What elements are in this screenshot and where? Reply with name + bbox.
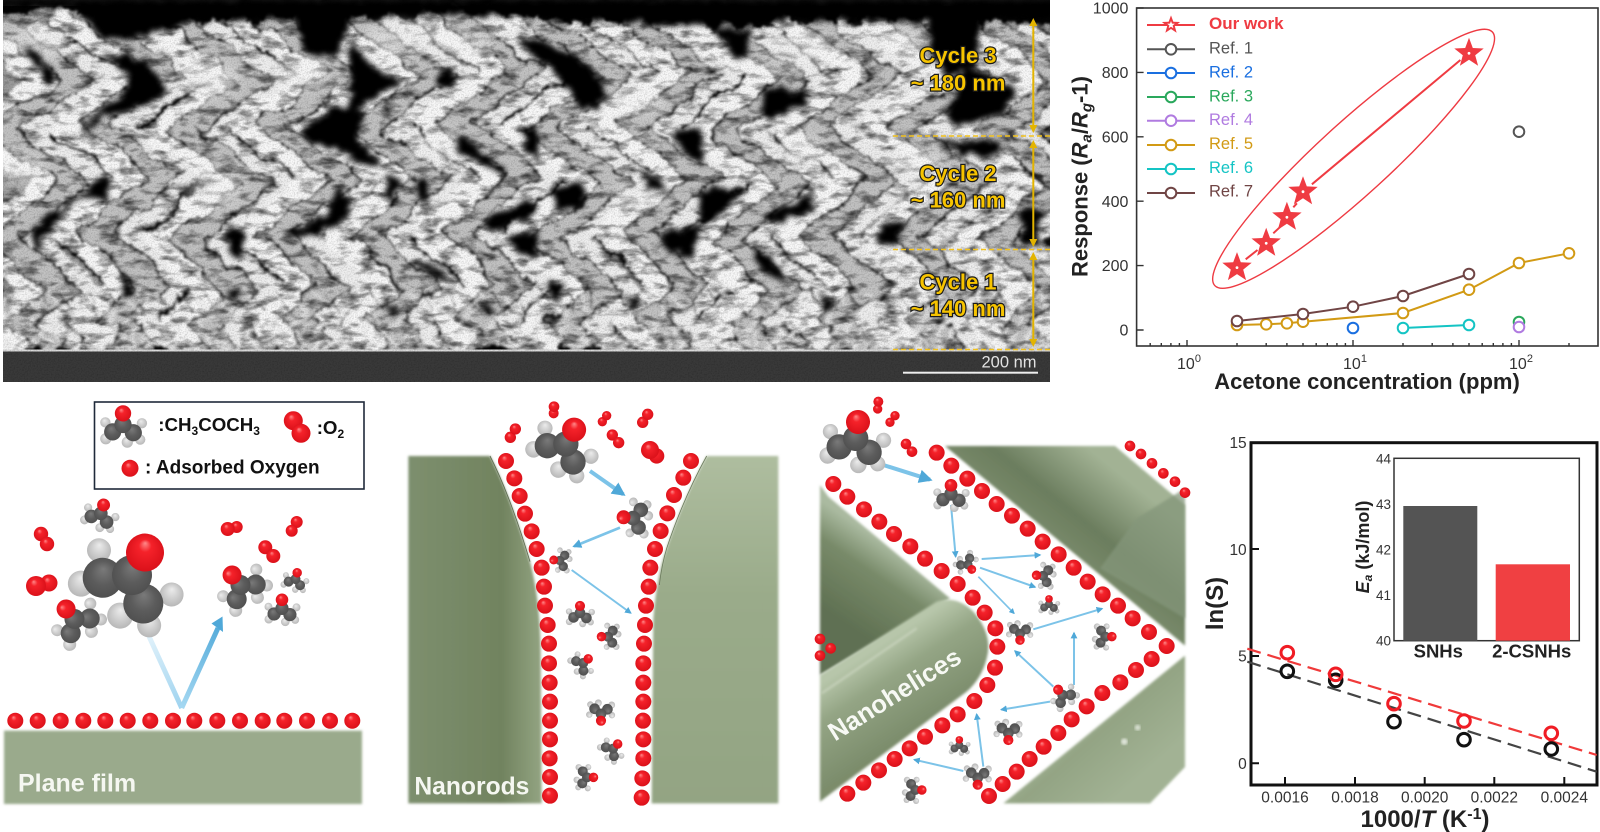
cycle labels (911, 43, 1005, 321)
cycle labels: ~ 160 nm (911, 187, 1005, 212)
inset bar chart: activation energy: (kJ/mol) (1353, 501, 1373, 575)
x-axis tick labels: 10 (1509, 356, 1527, 373)
x-axis tick labels: 0.0024 (1541, 790, 1588, 807)
highlight ellipse (1190, 5, 1517, 312)
chart legend: Ref. 3 (1209, 88, 1253, 106)
chart: ln(S) vs 1000/T (1202, 435, 1597, 832)
series: references 1 to 4 single points (1348, 126, 1524, 333)
panel: nanohelices (815, 397, 1190, 804)
y-axis tick labels: 800 (1102, 65, 1128, 82)
inset bar chart: activation energy: 43 (1376, 497, 1391, 512)
inset bar chart: activation energy: 2-CSNHs (1492, 641, 1571, 662)
series: reference 6 (1398, 320, 1474, 333)
chart legend: Ref. 4 (1209, 111, 1253, 129)
dashed cycle boundary lines (893, 136, 1050, 350)
inset bar chart: activation energy: 41 (1376, 588, 1391, 603)
adsorbed oxygen row (7, 713, 360, 729)
x-axis tick labels (1177, 353, 1533, 373)
molecule legend box: : Adsorbed Oxygen (145, 457, 320, 478)
nanorods label: Nanorods (414, 773, 529, 800)
x-axis title: Acetone concentration (ppm) (1214, 369, 1520, 394)
panel: nanorods (408, 401, 778, 806)
y-axis tick labels: 600 (1102, 130, 1128, 146)
cycle thickness arrows (1029, 18, 1037, 347)
diffusion arrows (883, 465, 1102, 771)
molecule legend box: :CH (158, 414, 192, 435)
y-axis title: Response (R (1068, 142, 1093, 277)
nanohelices label: Nanohelices (823, 643, 966, 747)
y-axis title: ln(S) (1202, 577, 1229, 630)
scale bar (903, 354, 1038, 374)
y-axis title: / (1068, 128, 1093, 134)
x-axis tick labels: 1 (1361, 353, 1367, 365)
y-axis tick labels (1093, 0, 1129, 340)
inset bar chart: activation energy: 44 (1376, 452, 1391, 466)
plane film label: Plane film (18, 770, 136, 798)
y-axis tick labels: 0 (1119, 322, 1128, 340)
x-axis tick labels: 0 (1195, 353, 1201, 365)
chart legend: Ref. 5 (1209, 135, 1253, 153)
y-axis tick labels: 1000 (1093, 0, 1129, 18)
chart legend: Ref. 2 (1209, 64, 1253, 82)
y-axis tick labels: 15 (1229, 435, 1247, 452)
chart legend: Ref. 6 (1209, 159, 1253, 177)
x-axis tick labels (1261, 790, 1588, 807)
y-axis title: R (1068, 112, 1093, 128)
y-axis title: a (1079, 134, 1096, 142)
y-axis title: g (1079, 103, 1096, 113)
molecule legend box: :O (317, 417, 337, 438)
molecule legend box (94, 402, 364, 489)
inset bar chart: activation energy: SNHs (1414, 641, 1463, 662)
reflection arrow (147, 616, 223, 708)
SEM micrograph panel (0, 0, 1117, 382)
molecule legend box: 2 (337, 427, 344, 441)
series: our work (1222, 38, 1484, 280)
gas molecules (505, 401, 664, 791)
chart legend: Ref. 1 (1209, 40, 1253, 58)
cycle labels: ~ 180 nm (911, 71, 1005, 96)
inset bar chart: activation energy (1353, 452, 1579, 662)
inset bar chart: activation energy: E (1353, 580, 1373, 593)
y-axis tick labels: 10 (1229, 542, 1247, 559)
cycle labels: Cycle 1 (919, 269, 997, 294)
inset bar chart: activation energy: 40 (1376, 634, 1391, 648)
chart legend: Ref. 7 (1209, 182, 1253, 200)
x-axis tick labels: 0.0016 (1261, 790, 1309, 807)
molecule legend box: 3 (192, 424, 199, 438)
cycle labels: Cycle 2 (919, 161, 997, 186)
x-axis tick labels: 0.0020 (1401, 790, 1449, 807)
x-axis tick labels: 10 (1177, 356, 1195, 373)
series: reference 7 (1232, 269, 1474, 326)
x-axis title: -1 (1467, 806, 1482, 823)
chart: response vs acetone concentration (1068, 0, 1598, 394)
y-axis title: -1) (1068, 76, 1093, 103)
molecule legend box: COCH (198, 414, 253, 435)
y-axis tick labels: 0 (1238, 756, 1247, 773)
chart legend: Our work (1209, 14, 1284, 33)
y-axis tick labels: 5 (1238, 648, 1247, 666)
series: reference 5 (1232, 248, 1574, 330)
adsorbed oxygen on rods (498, 453, 699, 806)
2-CSNHs data points (1281, 646, 1558, 740)
scale bar: 200 nm (981, 354, 1037, 372)
SNHs data points (1281, 665, 1558, 755)
inset bar chart: activation energy: a (1361, 574, 1375, 581)
x-axis tick labels: 0.0022 (1471, 790, 1518, 807)
x-axis tick labels: 0.0018 (1331, 790, 1379, 807)
inset bar chart: activation energy: 42 (1376, 542, 1391, 558)
panel: plane film (4, 493, 362, 804)
fit lines (1247, 649, 1597, 772)
x-axis tick labels: 10 (1343, 356, 1361, 373)
y-axis tick labels: 200 (1102, 258, 1128, 275)
cycle labels: Cycle 3 (919, 43, 997, 68)
cycle labels: ~ 140 nm (911, 296, 1005, 321)
x-axis tick labels: 2 (1527, 353, 1533, 365)
chart legend (1147, 14, 1284, 200)
y-axis tick labels (1229, 435, 1247, 773)
molecule legend box: 3 (253, 424, 260, 438)
diffusion arrows (572, 471, 631, 613)
y-axis tick labels: 400 (1102, 194, 1128, 211)
gas molecules (818, 397, 1117, 804)
adsorbed oxygen on helices (815, 441, 1190, 804)
gas molecules (26, 493, 312, 657)
